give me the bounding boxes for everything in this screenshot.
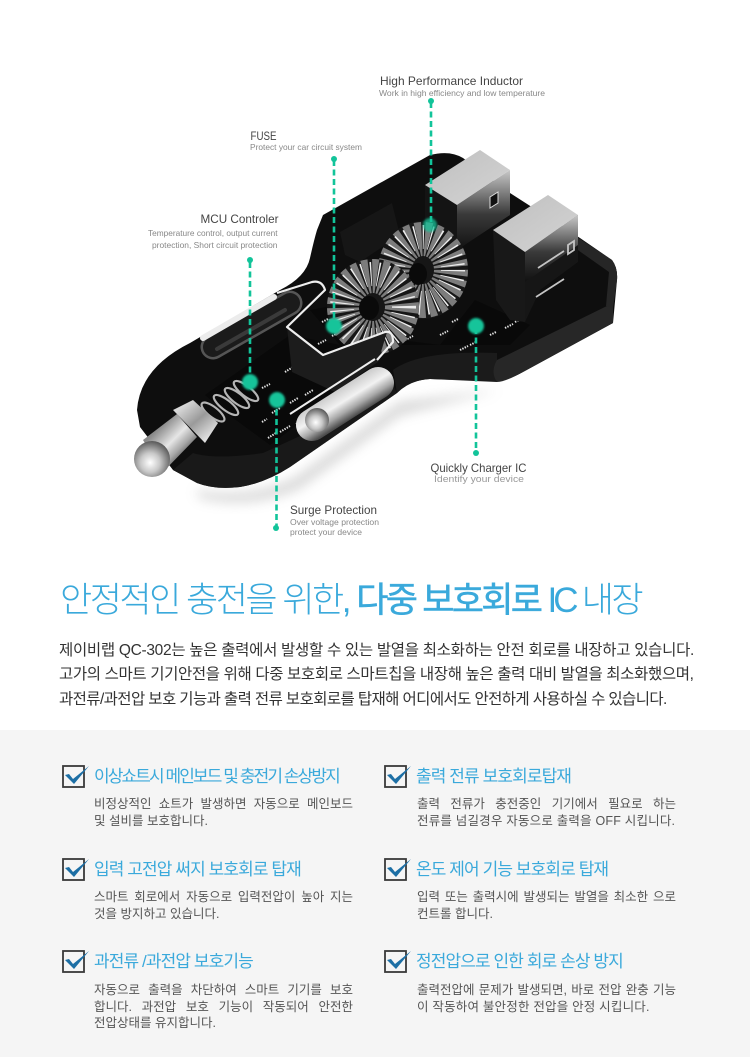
description [417,890,676,920]
heading: 입력 고전압 써지 보호회로 탑재 [94,860,301,879]
label: Quickly Charger IC [430,461,527,485]
label: FUSE: FUSE [250,129,276,143]
intro text [59,642,694,708]
intro text: 제이비랩 QC-302는 높은 출력에서 발생할 수 있는 발열을 최소화하는 안전 회로를 내장하고 있습니다. [59,642,694,658]
icon: check [384,950,411,973]
description: 비정상적인 쇼트가 발생하면 자동으로 메인보드 [94,797,353,811]
inductor coils [327,221,468,355]
label: Surge Protection [290,503,379,537]
description [417,983,676,1014]
icon: check [384,765,411,788]
feature 5 [62,950,353,1030]
label: MCU Controler: MCU Controler [200,212,279,226]
feature 3 [62,858,353,920]
label: High Performance Inductor: Work in high efficiency and low temperature [379,88,545,98]
label: MCU Controler: protection, Short circuit protection [152,240,278,250]
title: 안정적인 충전을 위한, 다중 보호회로 IC 내장 [60,581,641,620]
spring [199,378,261,425]
plug tip [134,400,218,477]
intro text: 과전류/과전압 보호 기능과 출력 전류 보호회로를 탑재해 어디에서도 안전하게 사용하실 수 있습니다. [59,690,667,708]
label: FUSE [250,129,362,152]
icon: check [62,765,89,788]
description: 전압상태를 유지합니다. [94,1016,216,1030]
label: MCU Controler: Temperature control, output current [148,228,278,238]
description: 출력전압에 문제가 발생되면, 바로 전압 완충 기능 [417,983,676,997]
callout: lines and dots [250,102,476,526]
label: Surge Protection: Surge Protection [290,503,377,517]
description: 및 설비를 보호합니다. [94,814,208,828]
heading: 정전압으로 인한 회로 손상 방지 [416,952,623,971]
label: Quickly Charger IC: Identify your device [434,474,524,485]
label: MCU Controler [148,212,279,250]
label: Surge Protection: protect your device [290,527,362,537]
intro text: 고가의 스마트 기기안전을 위해 다중 보호회로 스마트칩을 내장해 높은 출력 대비 발열을 최소화했으며, [59,666,694,683]
description [94,983,353,1030]
center block [287,327,387,392]
white contact spring outline [277,282,393,360]
feature 4 [384,858,676,920]
feature 2 [384,765,676,828]
heading: 이상쇼트시 메인보드 및 충전기 손상방지 [94,767,339,786]
description: 전류를 넘길경우 자동으로 출력을 OFF 시킵니다. [417,814,675,828]
description: 자동으로 출력을 차단하여 스마트 기기를 보호 [94,983,353,997]
heading: 과전류 /과전압 보호기능 [94,952,253,971]
description: 입력 또는 출력시에 발생되는 발열을 최소한 으로 [417,890,676,904]
product diagram: car charger cutaway [134,74,618,537]
side contact upper [203,297,290,349]
heading: 출력 전류 보호회로탑재 [416,767,571,786]
description: 컨트롤 합니다. [417,906,493,920]
description: 합니다. 과전압 보호 기능이 작동되어 안전한 [94,1000,353,1014]
description: 출력 전류가 충전중인 기기에서 필요로 하는 [417,797,676,811]
icon: check [384,858,411,881]
charger body [137,153,617,488]
circuit board [205,300,530,445]
label: FUSE: Protect your car circuit system [250,142,362,152]
feature 1 [62,765,353,828]
label: Quickly Charger IC: Quickly Charger IC [430,461,527,475]
description [417,797,676,828]
label: High Performance Inductor: High Performance Inductor [380,74,523,88]
side contact lower [290,359,378,432]
description: 것을 방지하고 있습니다. [94,906,219,920]
description [94,890,353,920]
description: 스마트 회로에서 자동으로 입력전압이 높아 지는 [94,890,353,904]
icon: check [62,950,89,973]
description [94,797,353,828]
usb port front [493,195,578,322]
feature 6 [384,950,676,1014]
description: 이 작동하여 불안정한 전압을 안정 시킵니다. [417,1000,650,1014]
panel: features [0,730,750,1057]
label: Surge Protection: Over voltage protection [290,517,379,527]
icon: check [62,858,89,881]
usb port rear [425,150,510,250]
label: High Performance Inductor [379,74,545,98]
shadow [195,390,500,502]
heading: 온도 제어 기능 보호회로 탑재 [416,860,608,879]
